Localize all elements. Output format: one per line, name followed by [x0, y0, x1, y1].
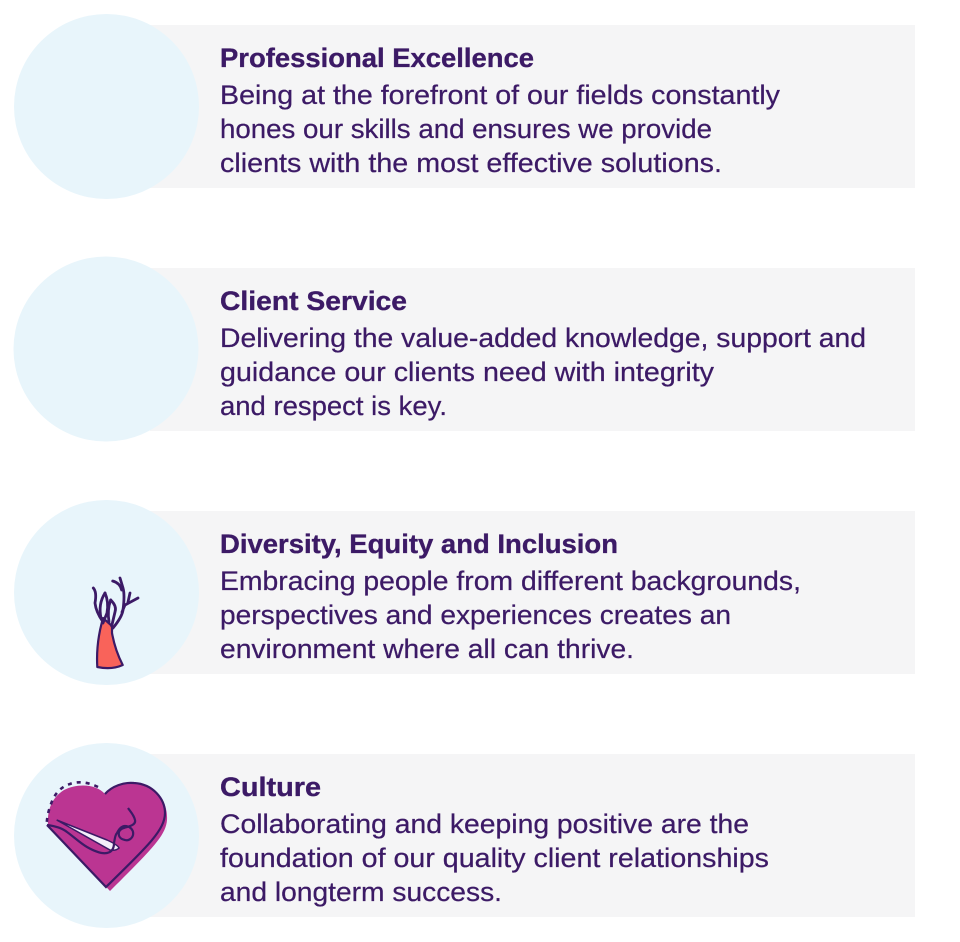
heading: professional excellence: Professional Excellence [220, 43, 534, 73]
panel: diversity, equity and inclusion [14, 500, 915, 685]
heading: culture: Culture [220, 772, 321, 802]
text: client service description: guidance our clients need with integrity [220, 357, 715, 387]
heading: client service: Client Service [220, 286, 407, 316]
text: client service description: Delivering the value-added knowledge, support and [220, 323, 866, 353]
text: diversity description: Embracing people from different backgrounds, [220, 566, 801, 596]
text: culture description [220, 809, 769, 907]
text: culture description: Collaborating and keeping positive are the [220, 809, 749, 839]
heading: diversity, equity and inclusion: Diversity, Equity and Inclusion [220, 529, 618, 559]
text: client service description [220, 323, 866, 421]
icon: heart with needle [47, 782, 167, 891]
text: diversity description [220, 566, 801, 664]
text: professional excellence description: clients with the most effective solutions. [220, 148, 722, 178]
text: diversity description: environment where all can thrive. [220, 634, 634, 664]
text: professional excellence description: hones our skills and ensures we provide [220, 114, 712, 144]
text: client service description: and respect is key. [220, 391, 447, 421]
text: culture description: and longterm success. [220, 877, 502, 907]
text: diversity description: perspectives and experiences creates an [220, 600, 731, 630]
text: professional excellence description: Being at the forefront of our fields constantly [220, 80, 781, 110]
icon: coral [93, 578, 138, 668]
panel: professional excellence [14, 14, 915, 199]
text: culture description: foundation of our quality client relationships [220, 843, 769, 873]
panel: culture [14, 743, 915, 928]
panel: client service [14, 256, 915, 442]
text: professional excellence description [220, 80, 781, 178]
